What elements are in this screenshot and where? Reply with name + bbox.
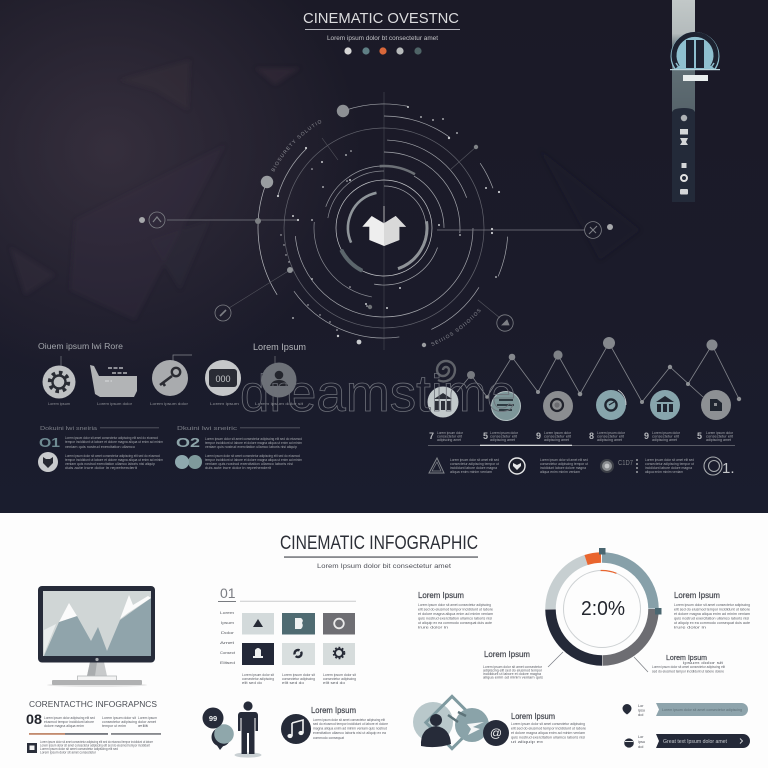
icon: person (262, 356, 296, 398)
circle: museum (650, 390, 680, 420)
callout: lower left: adipiscing elit sed do eiusmod tempor (483, 668, 543, 672)
block: section one: veniam quis nostrud exercitation ullamco (65, 445, 135, 449)
side labels: Amet (220, 641, 234, 645)
bottom row: target note: C1D7 (618, 460, 633, 467)
icon: people network (413, 696, 509, 749)
text block: music (311, 705, 388, 740)
steps row: consectetur elit (706, 434, 733, 438)
block: section two: tempor incididunt ut labore et dolore magna aliqua ut enim ad minim (205, 458, 302, 462)
note with icon (27, 740, 153, 754)
steps row: Lorem ipsum dolor (437, 431, 464, 435)
callout: upper left: et dolore magna aliqua enim ad minim veniam (418, 612, 493, 616)
icon: gear (42, 356, 76, 398)
circle: bank (428, 386, 458, 418)
callout: lower left: Lorem Ipsum (484, 650, 530, 659)
pill: dark row (624, 734, 750, 749)
pill: teal row: Lor (638, 704, 644, 708)
block: section one: tempor incididunt ut labore et dolore magna aliqua ut enim ad minim (65, 440, 163, 444)
panel: right sidebar (670, 0, 720, 202)
note with icon: Lorem ipsum dolor sit amet consectetur (40, 750, 97, 754)
text block: network: ut aliquip ex (511, 740, 544, 744)
note with icon: Lorem ipsum dolor sit amet consectetur adipiscing elit sed do eiusmod tempor incididunt (40, 744, 150, 748)
curved label: bottom right: SEIIIOS SOIIOIIOS (431, 308, 480, 346)
block: section one: Lorem ipsum dolor sit amet consectetur adipiscing elit sed do eiusmod (65, 454, 160, 458)
steps row: 5 (697, 431, 702, 441)
radial HUD diagram (139, 92, 613, 350)
donut value: 2:0% (581, 598, 625, 620)
steps row: adipiscing amet (597, 438, 622, 442)
steps row: consectetur elit (652, 434, 679, 438)
text block: music: Lorem ipsum dolor sit amet consectetur adipiscing elit (313, 718, 385, 722)
bottom row: warning note: Lorem ipsum dolor sit amet elit sed (450, 458, 499, 462)
side labels: Lorem (220, 611, 234, 615)
icon captions: Lorem ipsum (48, 402, 70, 406)
callout: lower right (634, 653, 725, 674)
side labels: Consect (220, 651, 235, 655)
tile captions: Lorem ipsum dolor sit (323, 673, 356, 677)
steps row: Lorem ipsum dolor (490, 431, 519, 435)
callout: lower left: incididunt ut labore et dolore magna (483, 672, 541, 676)
pill: dark row: dol (638, 744, 643, 749)
heading: icon row right: Lorem Ipsum (253, 342, 306, 352)
note with icon: Lorem ipsum dolor sit amet consectetur adipiscing elit sed (40, 747, 118, 751)
progress bars (29, 733, 161, 735)
block: section two: Lorem ipsum dolor sit amet consectetur adipiscing elit sed do eiusmod (205, 454, 300, 458)
donut segments (537, 544, 667, 674)
tile: coin (282, 613, 315, 634)
tile captions: elit sed do (242, 681, 262, 685)
steps row: adipiscing amet (652, 438, 677, 442)
steps row: 7 (429, 431, 434, 441)
tile captions: consectetur adipiscing (282, 677, 315, 681)
icon: speech bubbles: 99 (209, 714, 217, 723)
number and rule: 01 (220, 585, 236, 601)
stat: 08: Lorem ipsum dolor sit (102, 716, 136, 720)
circle: clock (596, 390, 626, 420)
icon captions: Lorem ipsum (210, 402, 239, 406)
side labels: Elitsed (220, 661, 235, 665)
stat: 08: Lorem ipsum (138, 716, 157, 720)
tile captions: elit sed do (282, 681, 304, 685)
bottom row: warning note (429, 458, 499, 474)
callout: upper right: Lorem Ipsum (674, 591, 720, 600)
steps row: Lorem ipsum dolor (652, 431, 681, 435)
block: section one: O1 (39, 435, 60, 450)
text block: music: sed do eiusmod tempor incididunt ut labore et dolore (313, 722, 388, 726)
callout: upper right: et dolore magna aliqua enim ad minim veniam (674, 612, 750, 616)
callout: lower right: Lorem Ipsum (666, 653, 707, 662)
callout: upper right: quis nostrud exercitation ullamco laboris nisi (674, 616, 749, 620)
watermark: dreamstime: dreamstime (240, 365, 516, 423)
panel: dark hero background (0, 0, 768, 513)
icon: monitor with chart (38, 586, 155, 687)
icon: key (152, 355, 192, 396)
bottom row: target note: incididunt labore dolore magna (645, 466, 692, 470)
tile: gear (323, 643, 355, 665)
block: section two: Lorem ipsum dolor sit amet consectetur adipiscing elit sed do eiusmod (205, 437, 302, 441)
steps row: consectetur elit (490, 434, 517, 438)
palette dots (344, 47, 422, 55)
tile: swirl (282, 643, 315, 665)
callout: lower left: Lorem ipsum dolor sit amet consectetur (483, 665, 543, 669)
title: cinematic overview (303, 10, 460, 42)
steps row: Lorem ipsum dolor (597, 431, 626, 435)
steps row: 9 (644, 431, 649, 441)
tile: triangle (242, 613, 274, 634)
text block: music: exercitation ullamco laboris nisi ut aliquip ex ea (313, 731, 386, 735)
note with icon: Lorem ipsum dolor sit amet consectetur adipiscing elit sed do eiusmod tempor incididunt ut labore (40, 740, 153, 744)
icon: counter (205, 360, 241, 396)
title: cinematic infographic: Lorem Ipsum dolor bit consectetur amet (317, 563, 451, 570)
callout: upper right (674, 591, 750, 630)
rings and arcs (167, 54, 585, 402)
steps row: adipiscing amet (706, 438, 731, 442)
block: section one: tempor incididunt ut labore et dolore magna aliqua ut enim ad minim (65, 458, 163, 462)
nodes and scatter dots (139, 105, 613, 347)
callout: upper left: quis nostrud exercitation ullamco laboris nisi (418, 616, 492, 620)
steps row: consectetur elit (544, 434, 571, 438)
bottom row: target note: Lorem ipsum dolor sit amet elit sed (645, 458, 694, 462)
text block: music: commodo consequat (313, 736, 344, 740)
tile captions (242, 673, 356, 685)
bottom row: warning note: consectetur adipiscing tempor ut (450, 462, 499, 466)
bottom row: target note (601, 458, 694, 475)
bottom row: target note: consectetur adipiscing tempor ut (645, 462, 694, 466)
bottom row: heart note (509, 458, 588, 474)
icon: music note (281, 714, 311, 744)
curved label: top left: BIOSURETY SOLUTIO (271, 120, 322, 172)
bottom row: target note: aliqua enim minim veniam (645, 470, 683, 474)
block: section one: veniam quis nostrud exercitation ullamco laboris nisi aliquip (65, 462, 155, 466)
stat: 08: eiusmod tempor incididunt labore (44, 720, 94, 724)
icon: lower left target (215, 305, 231, 321)
pill: teal row (622, 703, 748, 717)
steps row: 5 (483, 431, 488, 441)
side labels: Dolor (221, 631, 235, 635)
block: section two: Dkuini lwi sneiric (177, 426, 237, 432)
icon: standing person (234, 701, 262, 758)
callout: lower right: ipsum dolor sit (683, 661, 723, 665)
tile captions: Lorem ipsum dolor sit (242, 673, 274, 677)
icon captions (48, 402, 303, 406)
block: section two: veniam quis nostrud exercitation ullamco laboris nisi aliquip (205, 445, 297, 449)
side labels: Ipsum (221, 621, 234, 625)
icon: left target (149, 212, 165, 228)
block: section one (38, 426, 163, 472)
icon: right target (585, 222, 601, 238)
stat: 08 (26, 712, 157, 728)
zigzag line chart (457, 337, 741, 404)
title: cinematic infographic (280, 533, 478, 570)
steps row (428, 431, 735, 446)
block: section one: Lorem ipsum dolor sit amet consectetur adipiscing elit sed do eiusmod (65, 436, 158, 440)
donut chart (537, 544, 667, 674)
title: cinematic overview: Lorem ipsum dolor bt consectetur amet (327, 35, 438, 42)
circle: target (543, 391, 573, 421)
block: section one: Dokuini lwi sneiria (40, 426, 98, 432)
text block: network (511, 712, 586, 744)
icon: lower right target (497, 315, 513, 331)
pill: dark row: Great text Ipsum dolor amet (663, 739, 727, 745)
icon: tower logo (670, 32, 720, 81)
icon: central emblem (362, 206, 406, 246)
steps row: adipiscing amet (490, 438, 515, 442)
text block: music: Lorem Ipsum (311, 705, 356, 715)
block: section two: duis aute irure dolor in reprehenderit (205, 466, 271, 470)
icon: folder (90, 365, 137, 397)
pill: dark row: Lor (638, 735, 644, 739)
callout: upper left: Lorem Ipsum (418, 591, 464, 600)
text block: network: Lorem ipsum dolor sit amet consectetur adipiscing (511, 722, 585, 726)
callout: lower right: Lorem ipsum dolor sit amet consectetur adipiscing elit (652, 665, 725, 669)
icon captions: Lorem ipsum dolor sit (255, 402, 303, 406)
panel: white lower section (0, 513, 768, 768)
heading: lower left: CORENTACTHC INFOGRAPNCS (29, 699, 157, 709)
circle: hand (492, 392, 520, 420)
block: section two: veniam quis nostrud exercitation ullamco laboris nisi (205, 462, 293, 466)
stat: 08: 08 (26, 712, 43, 727)
title: cinematic overview: CINEMATIC OVESTNC (303, 10, 459, 27)
callout: upper right: Lorem ipsum dolor sit amet consectetur adipiscing (674, 603, 750, 607)
callout: upper left: elit sed do eiusmod tempor incididunt ut labore (418, 608, 493, 612)
side labels (220, 611, 235, 665)
text block: music: magna aliqua enim ad minim veniam quis nostrud (313, 726, 387, 730)
heading: icon row left: Oiuem ipsum lwi Rore (38, 341, 123, 351)
callout: upper left: ut aliquip ex ea commodo consequat duis aute (418, 621, 492, 625)
text block: network: elit sed do eiusmod tempor incididunt ut labore (511, 726, 586, 730)
block: section one: duis aute irure dolor in reprehenderit (65, 466, 137, 470)
stat: 08: Lorem ipsum dolor adipiscing elit sed (44, 716, 95, 720)
callout: upper right: ut aliquip ex ea commodo consequat duis aute (674, 621, 750, 625)
stat: 08: elit (138, 724, 148, 728)
steps row: 8 (589, 431, 594, 441)
icon captions: Lorem ipsum dolor (97, 402, 133, 406)
icon: speech bubbles (202, 708, 234, 750)
steps row: adipiscing amet (544, 438, 569, 442)
steps row: consectetur elit (437, 434, 462, 438)
text block: network: et dolore magna aliqua enim ad minim veniam (511, 731, 585, 735)
block: section two: tempor incididunt ut labore et dolore magna aliqua ut enim ad minim (205, 441, 302, 445)
tile captions: consectetur adipiscing (242, 677, 274, 681)
callout: upper left: irure dolor in (418, 626, 448, 630)
callout: upper right: elit sed do eiusmod tempor incididunt ut labore (674, 608, 750, 612)
icon: counter: 000 (215, 374, 231, 384)
circle: document (701, 390, 731, 420)
block: section two: O2 (176, 435, 200, 450)
icon: people network: @ (490, 726, 502, 740)
pill: dark row: ipsu (638, 740, 645, 744)
text block: network: quis nostrud exercitation ullamco laboris nisi (511, 736, 585, 740)
tile captions: Lorem ipsum dolor sit (282, 673, 315, 677)
callout: upper left: Lorem ipsum dolor sit amet consectetur adipiscing (418, 603, 491, 607)
pill: teal row: ipsu (638, 708, 645, 712)
icon: spiral (437, 361, 455, 381)
steps row: consectetur elit (597, 434, 624, 438)
callout: upper right: irure dolor in (674, 626, 706, 630)
bottom row: numbered ring: 1. (722, 460, 735, 477)
pill: teal row: Lorem ipsum dolor sit amet consectetur adipiscing (662, 708, 742, 712)
sidebar icons (680, 115, 688, 194)
tile: ring (323, 613, 355, 634)
steps row: adipiscing amet (437, 438, 461, 442)
callout: lower left (483, 650, 563, 680)
tile captions: consectetur adipiscing (323, 677, 356, 681)
bottom row: heart note: Lorem ipsum dolor sit amet elit sed (540, 458, 588, 462)
bottom row: heart note: incididunt labore dolore magna (540, 466, 586, 470)
icon captions: Lorem ipsum dolor (150, 402, 189, 406)
stat: 08: dolor amet (138, 720, 156, 724)
tile grid panel (218, 585, 356, 685)
steps row: Lorem ipsum dolor (706, 431, 734, 435)
bottom row: numbered ring (704, 457, 735, 477)
tile captions: elit sed do (323, 681, 345, 685)
callout: upper left (418, 591, 493, 630)
bottom row: heart note: consectetur adipiscing tempor ut (540, 462, 588, 466)
bottom row: warning note: aliqua enim minim veniam (450, 470, 492, 474)
bottom row: warning note: incididunt labore dolore magna (450, 466, 497, 470)
callout: lower left: aliqua enim ad minim veniam quis (483, 676, 544, 680)
pill: teal row: dol (638, 712, 643, 717)
callout: lower right: sed do eiusmod tempor incididunt ut labore dolore (652, 670, 724, 674)
steps row: Lorem ipsum dolor (544, 431, 572, 435)
stat: 08: tempor ut enim (102, 724, 126, 728)
steps row: 9 (536, 431, 541, 441)
tile: monument (242, 643, 274, 665)
bottom row: heart note: aliqua enim minim veniam (540, 470, 580, 474)
title: cinematic infographic: CINEMATIC INFOGRAPHIC (280, 533, 478, 554)
block: section two (175, 426, 302, 470)
stat: 08: dolore magna aliqua enim (44, 724, 84, 728)
text block: network: Lorem Ipsum (511, 712, 555, 721)
stat: 08: consectetur adipiscing (102, 720, 137, 724)
